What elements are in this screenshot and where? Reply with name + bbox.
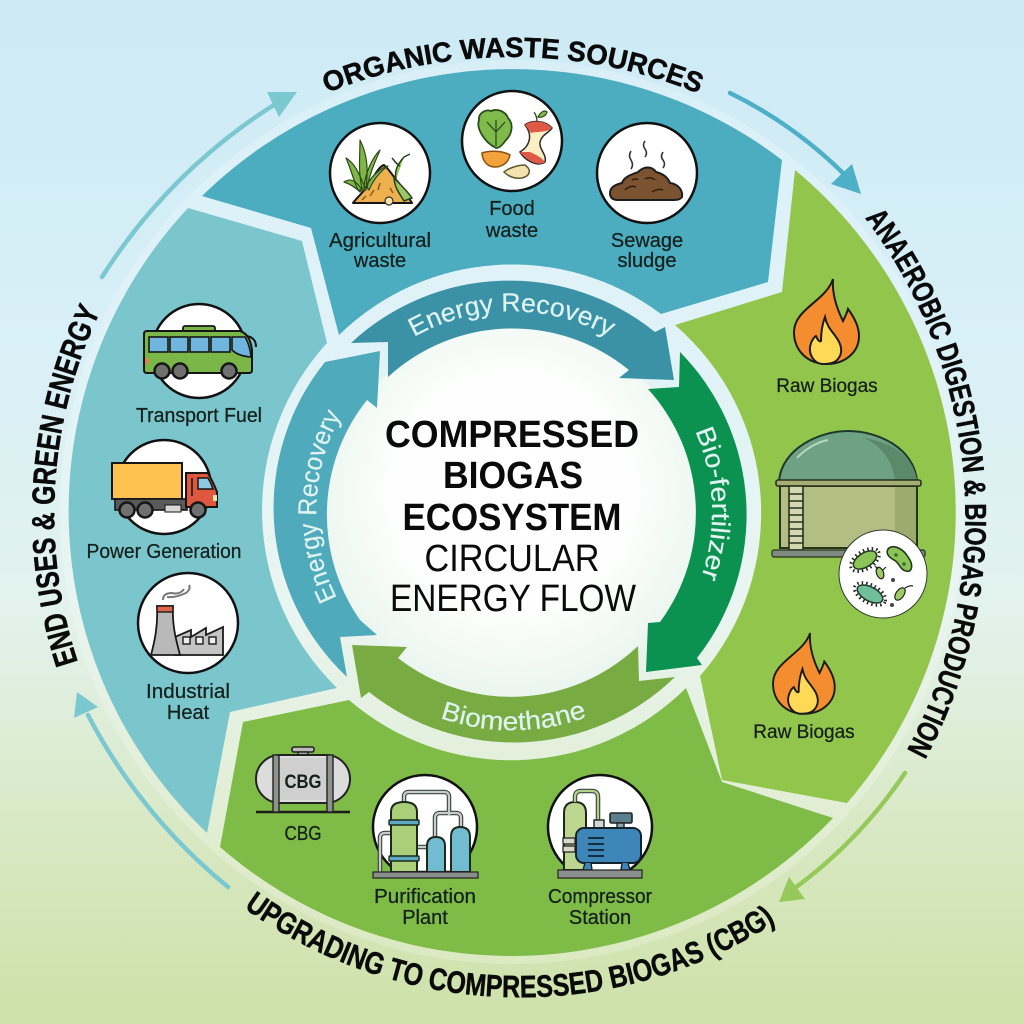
center title: BIOGAS (443, 455, 583, 497)
label: power generation: Power Generation (86, 541, 242, 563)
ring backing disc (60, 60, 964, 964)
icon: food waste (462, 91, 562, 191)
arrow: energy recovery top (351, 280, 674, 380)
icon: flame top (794, 279, 859, 364)
label: Bio-fertilizer (696, 426, 731, 582)
center title: CIRCULAR (424, 538, 600, 580)
panel: end uses and green energy (69, 208, 337, 833)
icon: CBG tank (256, 747, 350, 812)
arrow: energy recovery left (274, 351, 380, 677)
arrow: outer bottom-left (74, 692, 228, 887)
heading: end uses and green energy: END USES & GREEN ENERGY (32, 302, 98, 668)
heading: upgrading to compressed biogas: UPGRADING TO COMPRESSED BIOGAS (CBG) (247, 891, 776, 998)
arrow: bio-fertilizer (646, 352, 747, 672)
label: food waste: Food (489, 198, 535, 220)
arrow: outer top-right (730, 93, 861, 194)
icon: compressor station (548, 775, 652, 878)
panel: anaerobic digestion and biogas production (675, 170, 956, 803)
icon: bus (144, 304, 256, 398)
label: Energy Recovery (408, 293, 616, 338)
tank marking: CBG (284, 772, 322, 793)
icon: flame bottom (773, 633, 835, 714)
icon: agricultural waste (330, 123, 430, 223)
center title: ENERGY FLOW (390, 578, 636, 620)
label: Energy Recovery (298, 408, 342, 604)
panel: upgrading to compressed biogas (220, 688, 833, 956)
icon: sewage sludge (597, 123, 697, 223)
arrow: biomethane (352, 645, 675, 742)
label: Biomethane (442, 702, 585, 730)
label: transport fuel: Transport Fuel (136, 405, 262, 427)
label: raw biogas bottom: Raw Biogas (753, 722, 855, 743)
label: agricultural waste line 2: waste (353, 250, 406, 272)
label: sewage sludge: Sewage (611, 230, 683, 252)
icon: truck (112, 440, 217, 534)
label: raw biogas top: Raw Biogas (776, 376, 878, 397)
icon: purification plant (373, 775, 478, 878)
center title (385, 414, 639, 620)
label: sewage sludge line 2: sludge (618, 250, 676, 272)
center disc (326, 326, 698, 698)
arrow: outer bottom-right (779, 773, 905, 902)
heading: organic waste sources: ORGANIC WASTE SOURCES (323, 37, 703, 92)
label: industrial heat line 2: Heat (167, 702, 210, 724)
heading: anaerobic digestion and biogas production: ANAEROBIC DIGESTION & BIOGAS PRODUCTION (865, 210, 986, 759)
label: purification plant: Purification (374, 886, 476, 908)
label: CBG: CBG (284, 823, 322, 845)
center title: COMPRESSED (385, 414, 639, 456)
label: purification plant line 2: Plant (402, 907, 448, 929)
arrow: outer top-left (102, 92, 297, 277)
icon: digester tank (772, 431, 925, 557)
panel: organic waste sources (202, 69, 782, 335)
label: industrial heat: Industrial (146, 681, 230, 703)
label: compressor station line 2: Station (569, 907, 631, 929)
label: compressor station: Compressor (548, 886, 652, 908)
center title: ECOSYSTEM (402, 497, 622, 539)
label: agricultural waste: Agricultural (329, 230, 431, 252)
label: food waste line 2: waste (485, 220, 538, 242)
icon: microbes (839, 530, 927, 618)
icon: industrial factory (138, 573, 238, 673)
